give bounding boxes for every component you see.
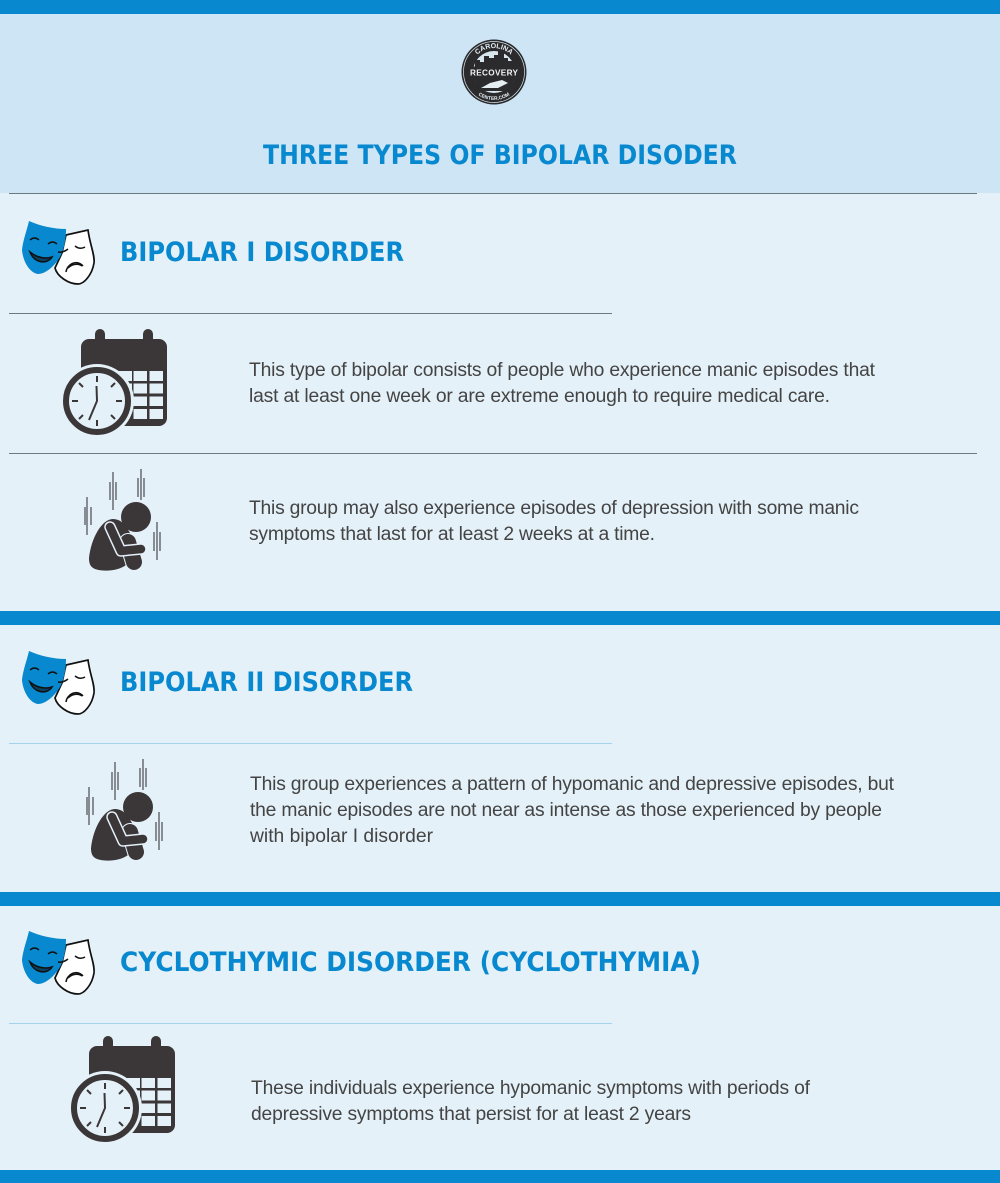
icon: calendar and clock [60,329,167,438]
heading: Bipolar II: BIPOLAR II DISORDER [120,667,413,698]
text: hypomanic pattern [249,774,895,847]
text: manic episodes: This type of bipolar consists of people who experience manic episodes that [249,360,876,381]
icon: person hugging knees [87,759,162,861]
text: hypomanic pattern: This group experiences a pattern of hypomanic and depressive episodes, but [250,774,895,795]
text: manic episodes: last at least one week or are extreme enough to require medical care. [249,386,830,407]
band divider 1 [0,611,1000,625]
text: depression episodes: This group may also experience episodes of depression with some manic [249,498,859,519]
text: cyclothymia symptoms [251,1078,811,1125]
band divider 2 [0,892,1000,906]
logo: Carolina Recovery Center: CAROLINA [475,43,512,55]
heading: Cyclothymic: CYCLOTHYMIC DISORDER (CYCLOTHYMIA) [120,947,701,978]
text: depression episodes [249,498,859,545]
top band [0,0,1000,14]
icon: calendar and clock [68,1036,175,1145]
icon: person hugging knees [85,469,160,571]
panel: Bipolar I Disorder [9,221,977,571]
bottom band [0,1170,1000,1183]
text: hypomanic pattern: the manic episodes are not near as intense as those experienced by people [250,800,882,821]
text: depression episodes: symptoms that last for at least 2 weeks at a time. [249,524,655,545]
logo: Carolina Recovery Center: RECOVERY [470,68,519,78]
icon: comedy and tragedy masks [22,931,94,994]
panel: Cyclothymic Disorder [9,931,811,1145]
text: manic episodes [249,360,876,407]
text: cyclothymia symptoms: These individuals experience hypomanic symptoms with periods of [251,1078,811,1099]
logo: Carolina Recovery Center [462,40,526,104]
text: cyclothymia symptoms: depressive symptoms that persist for at least 2 years [251,1104,691,1125]
logo: Carolina Recovery Center: CENTER.COM [478,92,510,100]
panel: Bipolar II Disorder [9,651,895,861]
heading: Bipolar I: BIPOLAR I DISORDER [120,237,404,268]
icon: comedy and tragedy masks [22,221,94,284]
text: hypomanic pattern: with bipolar I disorder [249,826,434,847]
title: THREE TYPES OF BIPOLAR DISODER [263,140,737,171]
header panel background [0,14,1000,193]
icon: comedy and tragedy masks [22,651,94,714]
